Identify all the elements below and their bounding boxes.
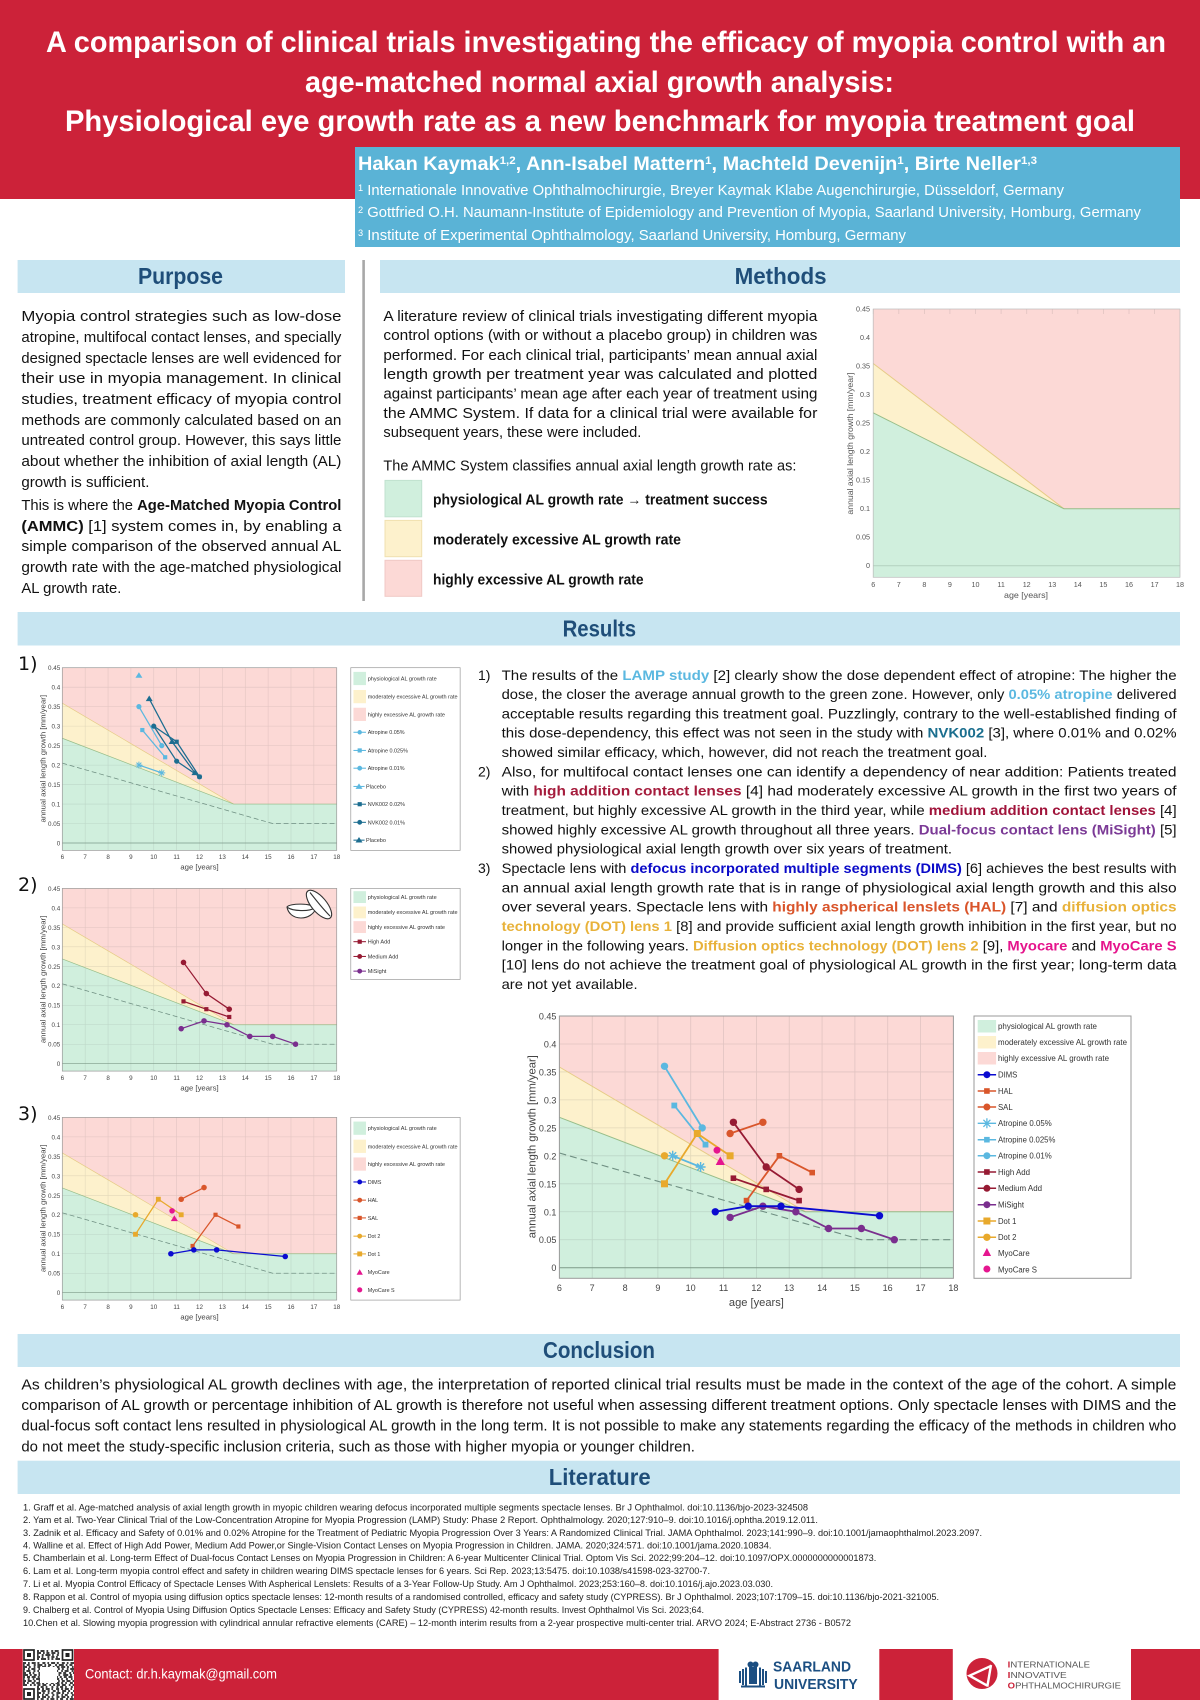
chart: all treatments: 12 bbox=[751, 1283, 761, 1293]
chart 3: spectacle lenses: 12 bbox=[196, 1304, 204, 1311]
logo: Saarland University bbox=[739, 1659, 858, 1693]
chart: AMMC zones: 0.2 bbox=[860, 447, 870, 456]
chart 3: spectacle lenses: 0.1 bbox=[52, 1251, 61, 1258]
icon: QR code bbox=[23, 1649, 74, 1700]
chart 1: atropine: 8 bbox=[106, 854, 110, 861]
text block: results: longer in the following years. Diffusion optics technology (DOT) lens 2 [9], Myocare and MyoCare S bbox=[502, 937, 1177, 953]
legend: AMMC classification: moderately excessive AL growth rate bbox=[433, 532, 681, 548]
panel: literature: 5. Chamberlain et al. Long-term Effect of Dual-focus Contact Lenses on Myopia Progression in Children: A 6-year Multicenter Clinical Trial. Optom Vis Sci. 2022;99:204–12. doi:10.1097/OPX.0000000000001873. bbox=[23, 1553, 876, 1564]
text block: results: an annual axial length growth rate that is in range of physiological axial length growth and this also bbox=[502, 879, 1177, 895]
header band bbox=[0, 0, 1200, 199]
logo: Internationale Innovative Ophthalmochirurgie: INNOVATIVE bbox=[1008, 1670, 1067, 1680]
chart 3: spectacle lenses: annual axial length growth [mm/year] bbox=[39, 1145, 48, 1272]
panel: purpose: studies, treatment efficacy of myopia control bbox=[21, 392, 341, 408]
panel: methods: length growth per treatment year was calculated and plotted bbox=[383, 367, 817, 383]
title bbox=[46, 26, 1166, 138]
heading: results bbox=[18, 612, 1180, 646]
chart 1: atropine: annual axial length growth [mm/year] bbox=[39, 695, 48, 822]
legend: chart 3: SAL bbox=[368, 1216, 378, 1222]
chart 1: atropine: age [years] bbox=[180, 863, 219, 872]
panel: methods: A literature review of clinical trials investigating different myopia bbox=[383, 309, 818, 325]
text block: results: showed similar efficacy, which, however, did not reach the treatment goal. bbox=[502, 744, 987, 760]
panel: purpose: Myopia control strategies such as low-dose bbox=[21, 309, 341, 325]
label: chart 3: 3) bbox=[18, 1103, 38, 1125]
legend: chart 2 bbox=[351, 888, 460, 979]
authors and affiliations box: , Birte Neller bbox=[904, 154, 1022, 175]
chart: all treatments: age [years] bbox=[729, 1297, 784, 1309]
chart 2: contact lenses: 0 bbox=[57, 1061, 61, 1068]
chart 2: contact lenses: 0.4 bbox=[52, 905, 61, 912]
legend: chart 3: HAL bbox=[368, 1198, 378, 1204]
icon: contact lenses bbox=[287, 886, 336, 923]
chart 1: atropine: 0.35 bbox=[48, 704, 61, 711]
chart: all treatments: 0.1 bbox=[544, 1207, 556, 1217]
series: high and medium add bbox=[181, 960, 232, 1019]
chart 1: atropine: 9 bbox=[129, 854, 133, 861]
chart 2: contact lenses: 10 bbox=[150, 1075, 158, 1082]
title: A comparison of clinical trials investigating the efficacy of myopia control with an bbox=[46, 26, 1166, 59]
chart 2: contact lenses: 17 bbox=[310, 1075, 318, 1082]
authors and affiliations box bbox=[355, 147, 1180, 247]
chart 2: contact lenses: 16 bbox=[287, 1075, 295, 1082]
legend: chart 2: moderately excessive AL growth rate bbox=[368, 910, 458, 916]
text block: results: Also, for multifocal contact lenses one can identify a dependency of near addition: Patients treated bbox=[502, 763, 1177, 779]
chart: all treatments: 0.25 bbox=[539, 1123, 556, 1133]
legend: all treatments: moderately excessive AL growth rate bbox=[998, 1038, 1128, 1047]
legend: chart 3: highly excessive AL growth rate bbox=[368, 1162, 445, 1168]
logo: Internationale Innovative Ophthalmochirurgie bbox=[966, 1658, 1121, 1691]
chart 3: spectacle lenses: 10 bbox=[150, 1304, 158, 1311]
legend: chart 3: DIMS bbox=[368, 1180, 382, 1186]
chart: AMMC zones: 0.45 bbox=[856, 304, 870, 314]
chart 3: spectacle lenses: 0.45 bbox=[48, 1115, 61, 1122]
chart 2: contact lenses: 0.45 bbox=[48, 886, 61, 893]
chart: AMMC zones: 11 bbox=[997, 580, 1005, 589]
chart 3: spectacle lenses: 0.25 bbox=[48, 1193, 61, 1200]
panel: literature: Literature bbox=[549, 1464, 651, 1490]
logo: Saarland University: UNIVERSITY bbox=[774, 1676, 858, 1693]
panel: purpose: designed spectacle lenses are well evidenced for bbox=[21, 351, 342, 367]
text block: results: acceptable results regarding this treatment goal. Puzzlingly, contrary to the well-established finding of bbox=[502, 705, 1177, 721]
chart 3: spectacle lenses: 0 bbox=[57, 1290, 61, 1297]
panel: literature: 6. Lam et al. Long-term myopia control effect and safety in children wearing DIMS spectacle lenses for 6 years. Sci Rep. 2023;13:5475. doi:10.1038/s41598-023-32700-7. bbox=[23, 1566, 710, 1577]
authors and affiliations box: 1 bbox=[358, 183, 363, 193]
legend: chart 3: physiological AL growth rate bbox=[368, 1126, 437, 1132]
chart 1: atropine: 14 bbox=[242, 854, 249, 861]
panel: purpose: simple comparison of the observed annual AL bbox=[21, 539, 341, 555]
panel: purpose: their use in myopia management. In clinical bbox=[21, 371, 341, 387]
chart 1: atropine: 0 bbox=[57, 840, 61, 847]
panel: methods: subsequent years, these were included. bbox=[383, 425, 641, 441]
chart: all treatments bbox=[526, 1012, 1131, 1309]
panel: conclusion: dual-focus soft contact lens resulted in physiological AL growth in the long term. It is not possible to make any statements regarding the efficacy of the methods in children who bbox=[21, 1418, 1176, 1435]
panel: conclusion: comparison of AL growth or percentage inhibition of AL growth is therefore not useful when assessing different treatment options. Only spectacle lenses with DIMS and the bbox=[21, 1397, 1176, 1414]
chart 2: contact lenses: 7 bbox=[83, 1075, 87, 1082]
authors and affiliations box: , Ann-Isabel Mattern bbox=[516, 154, 705, 175]
series: DOT lenses bbox=[661, 1130, 734, 1187]
legend: all treatments: DIMS bbox=[998, 1070, 1017, 1080]
series: DIMS bbox=[168, 1247, 288, 1259]
series: atropine doses and placebo bbox=[135, 672, 167, 776]
chart 2: contact lenses: 6 bbox=[61, 1075, 65, 1082]
legend: all treatments bbox=[974, 1016, 1131, 1278]
panel: purpose: untreated control group. However, this says little bbox=[21, 433, 341, 449]
panel: methods: control options (with or without a placebo group) in children was bbox=[383, 328, 817, 344]
panel: purpose: methods are commonly calculated based on an bbox=[21, 413, 341, 429]
legend: chart 3: moderately excessive AL growth rate bbox=[368, 1144, 458, 1150]
series: HAL and SAL bbox=[178, 1185, 240, 1248]
panel: purpose: This is where the Age-Matched Myopia Control bbox=[21, 498, 341, 514]
chart: all treatments: annual axial length growth [mm/year] bbox=[526, 1055, 538, 1238]
series: atropine doses bbox=[661, 1063, 708, 1172]
legend: all treatments: MiSight bbox=[998, 1200, 1025, 1210]
legend: chart 1: highly excessive AL growth rate bbox=[368, 712, 445, 718]
chart 3: spectacle lenses: 14 bbox=[242, 1304, 249, 1311]
chart: all treatments: 16 bbox=[883, 1283, 893, 1293]
panel: conclusion: do not meet the study-specific inclusion criteria, such as those with higher myopia or younger children. bbox=[21, 1439, 695, 1456]
chart: all treatments: 15 bbox=[850, 1283, 860, 1293]
chart: AMMC zones: annual axial length growth [mm/year] bbox=[846, 373, 855, 515]
chart 1: atropine: 18 bbox=[333, 854, 341, 861]
logo: Internationale Innovative Ophthalmochirurgie: OPHTHALMOCHIRURGIE bbox=[1008, 1681, 1121, 1691]
panel: conclusion: As children’s physiological AL growth declines with age, the interpretation of reported clinical trial results must be made in the context of the age of the cohort. A simple bbox=[21, 1376, 1176, 1393]
authors and affiliations box: Institute of Experimental Ophthalmology, Saarland University, Homburg, Germany bbox=[363, 228, 907, 244]
legend: AMMC classification bbox=[385, 480, 768, 596]
chart 2: contact lenses: 0.25 bbox=[48, 964, 61, 971]
text block: results: technology (DOT) lens 1 [8] and provide sufficient axial length growth inhibition in the first year, but no bbox=[502, 918, 1177, 934]
chart: all treatments: 0.15 bbox=[539, 1179, 556, 1189]
chart: all treatments: 13 bbox=[784, 1283, 794, 1293]
legend: all treatments: Dot 1 bbox=[998, 1217, 1017, 1226]
chart: AMMC zones: 0.15 bbox=[856, 476, 870, 484]
legend: chart 1: Placebo bbox=[366, 838, 386, 844]
chart 1: atropine: 13 bbox=[219, 854, 226, 861]
series: high and medium add bbox=[730, 1119, 803, 1203]
panel: literature: 1. Graff et al. Age-matched analysis of axial length growth in myopic children wearing defocus incorporated multiple segments spectacle lenses. Br J Ophthalmol. doi:10.1136/bjo-2023-324508 bbox=[23, 1502, 808, 1514]
chart: AMMC zones: 0.05 bbox=[856, 532, 870, 542]
panel: literature: 3. Zadnik et al. Efficacy and Safety of 0.01% and 0.02% Atropine for the Treatment of Pediatric Myopia Progression Over 3 Years: A Randomized Clinical Trial. JAMA Ophthalmol. 2023;141:990–9. doi:10.1001/jamaophthalmol.2023.2097. bbox=[23, 1528, 982, 1539]
chart 3: spectacle lenses: 0.3 bbox=[52, 1173, 61, 1180]
legend: chart 2: Medium Add bbox=[368, 954, 398, 960]
panel: literature: 4. Walline et al. Effect of High Add Power, Medium Add Power,or Single-Vision Contact Lenses on Myopia Progression in Children. JAMA. 2020;324:571. doi:10.1001/jama.2020.10834. bbox=[23, 1540, 771, 1552]
chart 2: contact lenses: 8 bbox=[106, 1075, 110, 1082]
legend: chart 2: MiSight bbox=[368, 969, 387, 975]
chart: all treatments: 0.45 bbox=[539, 1012, 556, 1022]
chart 1: atropine: 0.4 bbox=[52, 685, 61, 692]
series: DOT lenses bbox=[133, 1197, 184, 1237]
legend: chart 1: Atropine 0.025% bbox=[368, 748, 408, 754]
legend: chart 2: physiological AL growth rate bbox=[368, 895, 437, 901]
panel: methods: the AMMC System. If data for a clinical trial were available for bbox=[383, 406, 818, 422]
chart: AMMC zones: 10 bbox=[972, 580, 980, 589]
series: NVK002 doses and placebo bbox=[146, 696, 202, 779]
text block: results: 3) bbox=[478, 860, 490, 876]
chart 2: contact lenses bbox=[39, 886, 460, 1092]
legend: chart 1: NVK002 0.01% bbox=[368, 820, 405, 826]
chart 3: spectacle lenses: 0.05 bbox=[48, 1271, 61, 1278]
text block: results: this dose-dependency, this effect was not seen in the study with NVK002 [3], where 0.01% and 0.02% bbox=[502, 725, 1177, 741]
chart 3: spectacle lenses: 18 bbox=[333, 1304, 341, 1311]
panel: purpose: about whether the inhibition of axial length (AL) bbox=[21, 454, 341, 470]
legend: chart 3: MyoCare S bbox=[368, 1288, 395, 1294]
chart 1: atropine: 10 bbox=[150, 854, 158, 861]
panel: purpose: growth is sufficient. bbox=[21, 475, 149, 491]
chart: AMMC zones: 15 bbox=[1099, 580, 1107, 589]
chart: AMMC zones: 17 bbox=[1151, 580, 1159, 589]
chart: AMMC zones: age [years] bbox=[1004, 590, 1048, 600]
text block: results: Spectacle lens with defocus incorporated multiple segments (DIMS) [6] achieves the best results with bbox=[502, 860, 1177, 876]
panel: methods: against participants’ mean age after each year of treatment using bbox=[383, 386, 817, 402]
chart 1: atropine: 0.2 bbox=[52, 763, 61, 770]
legend: all treatments: HAL bbox=[998, 1087, 1013, 1096]
legend: chart 1 bbox=[351, 668, 460, 850]
series: HAL and SAL bbox=[726, 1119, 815, 1203]
chart 1: atropine: 6 bbox=[61, 854, 65, 861]
chart 1: atropine: 11 bbox=[173, 854, 180, 861]
chart 2: contact lenses: 0.2 bbox=[52, 983, 61, 990]
legend: all treatments: High Add bbox=[998, 1168, 1030, 1177]
chart 3: spectacle lenses bbox=[39, 1115, 460, 1321]
text block: results: showed highly excessive AL growth throughout all three years. Dual-focus contact lens (MiSight) [5] bbox=[502, 821, 1177, 837]
chart: all treatments: 17 bbox=[916, 1283, 926, 1293]
chart: AMMC zones: 18 bbox=[1176, 580, 1184, 589]
title: Physiological eye growth rate as a new benchmark for myopia treatment goal bbox=[65, 105, 1135, 138]
chart: all treatments: 9 bbox=[655, 1283, 660, 1293]
legend: all treatments: Dot 2 bbox=[998, 1233, 1017, 1242]
text block: results: over several years. Spectacle lens with highly aspherical lenslets (HAL) [7] and diffusion optics bbox=[502, 899, 1177, 915]
contact: Contact: dr.h.kaymak@gmail.com bbox=[85, 1666, 277, 1682]
panel: literature: 10.Chen et al. Slowing myopia progression with cylindrical annular refractive elements (CARE) – 12-month interim results from a 2-year prospective multi-center trial. ARVO 2024; E-Abstract 2736 - B0572 bbox=[23, 1618, 851, 1629]
chart: all treatments: 6 bbox=[557, 1283, 562, 1293]
legend: chart 2: highly excessive AL growth rate bbox=[368, 925, 445, 931]
panel: methods: Methods bbox=[735, 263, 827, 289]
text block: results: with high addition contact lenses [4] had moderately excessive AL growth in the first two years of bbox=[500, 783, 1177, 799]
series: DIMS bbox=[712, 1202, 883, 1219]
chart: all treatments: 0.05 bbox=[539, 1235, 556, 1245]
authors and affiliations box: 1 bbox=[897, 155, 904, 167]
chart 3: spectacle lenses: 0.4 bbox=[52, 1134, 61, 1141]
chart: AMMC zones: 8 bbox=[922, 580, 926, 589]
chart: AMMC zones: 0.35 bbox=[856, 362, 870, 370]
chart: all treatments: 10 bbox=[686, 1283, 696, 1293]
legend: chart 2: High Add bbox=[368, 940, 390, 946]
chart 2: contact lenses: 14 bbox=[242, 1075, 249, 1082]
chart 1: atropine: 0.15 bbox=[48, 782, 61, 789]
chart 3: spectacle lenses: 15 bbox=[265, 1304, 272, 1311]
chart 3: spectacle lenses: 11 bbox=[173, 1304, 180, 1311]
legend: AMMC classification: highly excessive AL growth rate bbox=[433, 572, 644, 588]
chart: AMMC zones bbox=[846, 304, 1184, 600]
text block: results: dose, the closer the average annual growth to the green zone. However, only 0.05% atropine delivered bbox=[502, 686, 1177, 702]
chart 3: spectacle lenses: 16 bbox=[287, 1304, 295, 1311]
chart 2: contact lenses: 0.1 bbox=[52, 1022, 61, 1029]
chart: AMMC zones: 0.4 bbox=[860, 333, 870, 342]
chart 1: atropine bbox=[39, 665, 460, 872]
chart: all treatments: 18 bbox=[948, 1283, 958, 1293]
panel: purpose: growth rate with the age-matched physiological bbox=[21, 560, 341, 576]
chart 3: spectacle lenses: 8 bbox=[106, 1304, 110, 1311]
legend: all treatments: physiological AL growth rate bbox=[998, 1022, 1098, 1031]
logo: Internationale Innovative Ophthalmochirurgie: INTERNATIONALE bbox=[1008, 1659, 1090, 1669]
text block: results: are not yet available. bbox=[502, 976, 638, 992]
chart: AMMC zones: 0 bbox=[866, 561, 870, 570]
chart 2: contact lenses: 9 bbox=[129, 1075, 133, 1082]
chart 3: spectacle lenses: 0.35 bbox=[48, 1154, 61, 1161]
panel: literature bbox=[18, 1461, 1180, 1629]
text block: results bbox=[478, 667, 1177, 992]
text block: results: [10] lens do not achieve the treatment goal of physiological AL growth in the first year; long-term data bbox=[502, 957, 1177, 973]
chart: AMMC zones: 14 bbox=[1074, 580, 1082, 589]
legend: chart 1: moderately excessive AL growth rate bbox=[368, 695, 458, 701]
chart 1: atropine: 0.45 bbox=[48, 665, 61, 672]
chart 1: atropine: 17 bbox=[310, 854, 318, 861]
authors and affiliations box: 2 bbox=[358, 205, 363, 215]
chart 1: atropine: 0.3 bbox=[52, 724, 61, 731]
series: MyoCare bbox=[714, 1147, 725, 1165]
legend: chart 3: Dot 2 bbox=[368, 1234, 380, 1240]
chart: all treatments: 0.2 bbox=[544, 1151, 556, 1161]
legend: AMMC classification: physiological AL growth rate → treatment success bbox=[433, 492, 768, 508]
authors and affiliations box: 1 bbox=[705, 155, 712, 167]
legend: all treatments: Atropine 0.05% bbox=[998, 1119, 1052, 1128]
chart 3: spectacle lenses: age [years] bbox=[180, 1312, 219, 1321]
legend: all treatments: Atropine 0.025% bbox=[998, 1136, 1055, 1144]
legend: all treatments: MyoCare bbox=[998, 1249, 1030, 1258]
chart: AMMC zones: 9 bbox=[948, 580, 952, 589]
chart 1: atropine: 16 bbox=[287, 854, 295, 861]
panel: methods: performed. For each clinical trial, participants’ mean annual axial bbox=[383, 348, 817, 364]
authors and affiliations box: 1,3 bbox=[1021, 155, 1037, 167]
chart: all treatments: 14 bbox=[817, 1283, 827, 1293]
text block: results: The results of the LAMP study [2] clearly show the dose dependent effect of atropine: The higher the bbox=[502, 667, 1177, 683]
legend: all treatments: MyoCare S bbox=[998, 1266, 1037, 1274]
chart 1: atropine: 0.25 bbox=[48, 743, 61, 750]
chart 3: spectacle lenses: 6 bbox=[61, 1304, 65, 1311]
chart 3: spectacle lenses: 17 bbox=[310, 1304, 318, 1311]
chart 2: contact lenses: 11 bbox=[173, 1075, 180, 1082]
panel: purpose: Purpose bbox=[138, 263, 223, 289]
chart: AMMC zones: 0.1 bbox=[860, 504, 870, 513]
chart 1: atropine: 0.05 bbox=[48, 821, 61, 828]
panel: literature: 8. Rappon et al. Control of myopia using diffusion optics spectacle lenses: 12-month results of a randomised controlled, efficacy and safety study (CYPRESS). Br J Ophthalmol. 2023;107:1709–15. doi:10.1136/bjo-2021-321005. bbox=[23, 1592, 939, 1603]
chart 3: spectacle lenses: 0.2 bbox=[52, 1212, 61, 1219]
chart 2: contact lenses: 18 bbox=[333, 1075, 341, 1082]
chart: AMMC zones: 6 bbox=[871, 580, 875, 589]
legend: chart 3: Dot 1 bbox=[368, 1252, 380, 1258]
text block: results: showed physiological axial length growth over six years of treatment. bbox=[502, 841, 952, 857]
panel: literature: 2. Yam et al. Two-Year Clinical Trial of the Low-Concentration Atropine for Myopia Progression (LAMP) Study: Phase 2 Report. Ophthalmology. 2020;127:910–9. doi:10.1016/j.ophtha.2019.12.011. bbox=[23, 1515, 818, 1526]
series: MiSight bbox=[178, 1018, 298, 1047]
chart: all treatments: 0.4 bbox=[544, 1040, 556, 1050]
legend: chart 1: Atropine 0.01% bbox=[368, 766, 405, 772]
series: MiSight bbox=[726, 1202, 898, 1243]
chart: AMMC zones: 7 bbox=[897, 580, 901, 589]
legend: all treatments: Atropine 0.01% bbox=[998, 1152, 1052, 1160]
chart: AMMC zones: 12 bbox=[1023, 580, 1031, 589]
chart 3: spectacle lenses: 9 bbox=[129, 1304, 133, 1311]
chart 2: contact lenses: 0.35 bbox=[48, 925, 61, 932]
footer band bbox=[0, 1649, 1200, 1700]
legend: chart 1: physiological AL growth rate bbox=[368, 676, 437, 682]
chart 1: atropine: 12 bbox=[196, 854, 204, 861]
legend: chart 3 bbox=[351, 1117, 460, 1300]
panel: purpose: AL growth rate. bbox=[21, 581, 121, 597]
chart: all treatments: 7 bbox=[590, 1283, 595, 1293]
series: MyoCare bbox=[169, 1208, 178, 1221]
chart 2: contact lenses: 13 bbox=[219, 1075, 226, 1082]
chart: all treatments: 0.35 bbox=[539, 1067, 556, 1077]
chart 2: contact lenses: 0.3 bbox=[52, 944, 61, 951]
authors and affiliations box: 3 bbox=[358, 228, 363, 238]
chart 2: contact lenses: annual axial length growth [mm/year] bbox=[39, 916, 48, 1043]
chart 2: contact lenses: 12 bbox=[196, 1075, 204, 1082]
panel: purpose bbox=[18, 260, 345, 597]
panel: methods bbox=[380, 260, 1180, 474]
legend: chart 1: Placebo bbox=[366, 784, 386, 790]
chart 3: spectacle lenses: 0.15 bbox=[48, 1232, 61, 1239]
chart 3: spectacle lenses: 7 bbox=[83, 1304, 87, 1311]
text block: results: 1) bbox=[478, 667, 490, 683]
heading: results: Results bbox=[563, 616, 636, 642]
legend: chart 1: NVK002 0.02% bbox=[368, 802, 405, 808]
chart: all treatments: 0 bbox=[551, 1263, 556, 1273]
text block: results: 2) bbox=[478, 763, 490, 779]
panel: literature: 7. Li et al. Myopia Control Efficacy of Spectacle Lenses With Aspherical Lenslets: Results of a 3-Year Follow-Up Study. Am J Ophthalmol. 2023;253:160–8. doi:10.1016/j.ajo.2023.03.030. bbox=[23, 1579, 773, 1590]
chart: all treatments: 11 bbox=[719, 1283, 728, 1293]
chart: AMMC zones: 0.3 bbox=[860, 390, 870, 399]
chart: all treatments: 8 bbox=[623, 1283, 628, 1293]
panel: purpose: (AMMC) [1] system comes in, by enabling a bbox=[21, 519, 342, 535]
title: age-matched normal axial growth analysis: bbox=[305, 66, 894, 99]
panel: purpose: atropine, multifocal contact lenses, and specially bbox=[21, 330, 342, 346]
chart 1: atropine: 0.1 bbox=[52, 802, 61, 809]
chart 1: atropine: 15 bbox=[265, 854, 272, 861]
chart: all treatments: 0.3 bbox=[544, 1095, 556, 1105]
panel: literature: 9. Chalberg et al. Control of Myopia Using Diffusion Optics Spectacle Lenses: Efficacy and Safety Study (CYPRESS) 42-month results. Invest Ophthalmol Vis Sci. 2023;64. bbox=[23, 1605, 704, 1616]
chart: AMMC zones: 0.25 bbox=[856, 418, 870, 428]
legend: chart 3: MyoCare bbox=[368, 1270, 390, 1276]
legend: all treatments: highly excessive AL growth rate bbox=[998, 1054, 1110, 1063]
chart 1: atropine: 7 bbox=[83, 854, 87, 861]
chart: AMMC zones: 13 bbox=[1048, 580, 1056, 589]
chart 2: contact lenses: 0.05 bbox=[48, 1042, 61, 1049]
authors and affiliations box: Gottfried O.H. Naumann-Institute of Epidemiology and Prevention of Myopia, Saarland University, Homburg, Germany bbox=[363, 205, 1142, 221]
chart 2: contact lenses: 0.15 bbox=[48, 1003, 61, 1010]
chart: AMMC zones: 16 bbox=[1125, 580, 1133, 589]
text block: results: treatment, but highly excessive AL growth in the third year, while medium addition contact lenses [4] bbox=[502, 802, 1177, 818]
logo: Saarland University: SAARLAND bbox=[773, 1659, 851, 1676]
chart 3: spectacle lenses: 13 bbox=[219, 1304, 226, 1311]
chart 2: contact lenses: age [years] bbox=[180, 1083, 219, 1092]
legend: all treatments: Medium Add bbox=[998, 1184, 1042, 1193]
authors and affiliations box: 1,2 bbox=[500, 155, 516, 167]
panel: conclusion bbox=[18, 1334, 1180, 1456]
panel: conclusion: Conclusion bbox=[543, 1337, 655, 1363]
label: chart 1: 1) bbox=[18, 653, 38, 675]
label: chart 2: 2) bbox=[18, 874, 38, 896]
authors and affiliations box: , Machteld Devenijn bbox=[712, 154, 897, 175]
authors and affiliations box: Hakan Kaymak bbox=[358, 154, 493, 175]
authors and affiliations box: Internationale Innovative Ophthalmochirurgie, Breyer Kaymak Klabe Augenchirurgie, Düsseldorf, Germany bbox=[363, 183, 1065, 199]
legend: all treatments: SAL bbox=[998, 1103, 1013, 1112]
panel: methods: The AMMC System classifies annual axial length growth rate as: bbox=[383, 458, 796, 474]
legend: chart 1: Atropine 0.05% bbox=[368, 730, 405, 736]
chart 2: contact lenses: 15 bbox=[265, 1075, 272, 1082]
